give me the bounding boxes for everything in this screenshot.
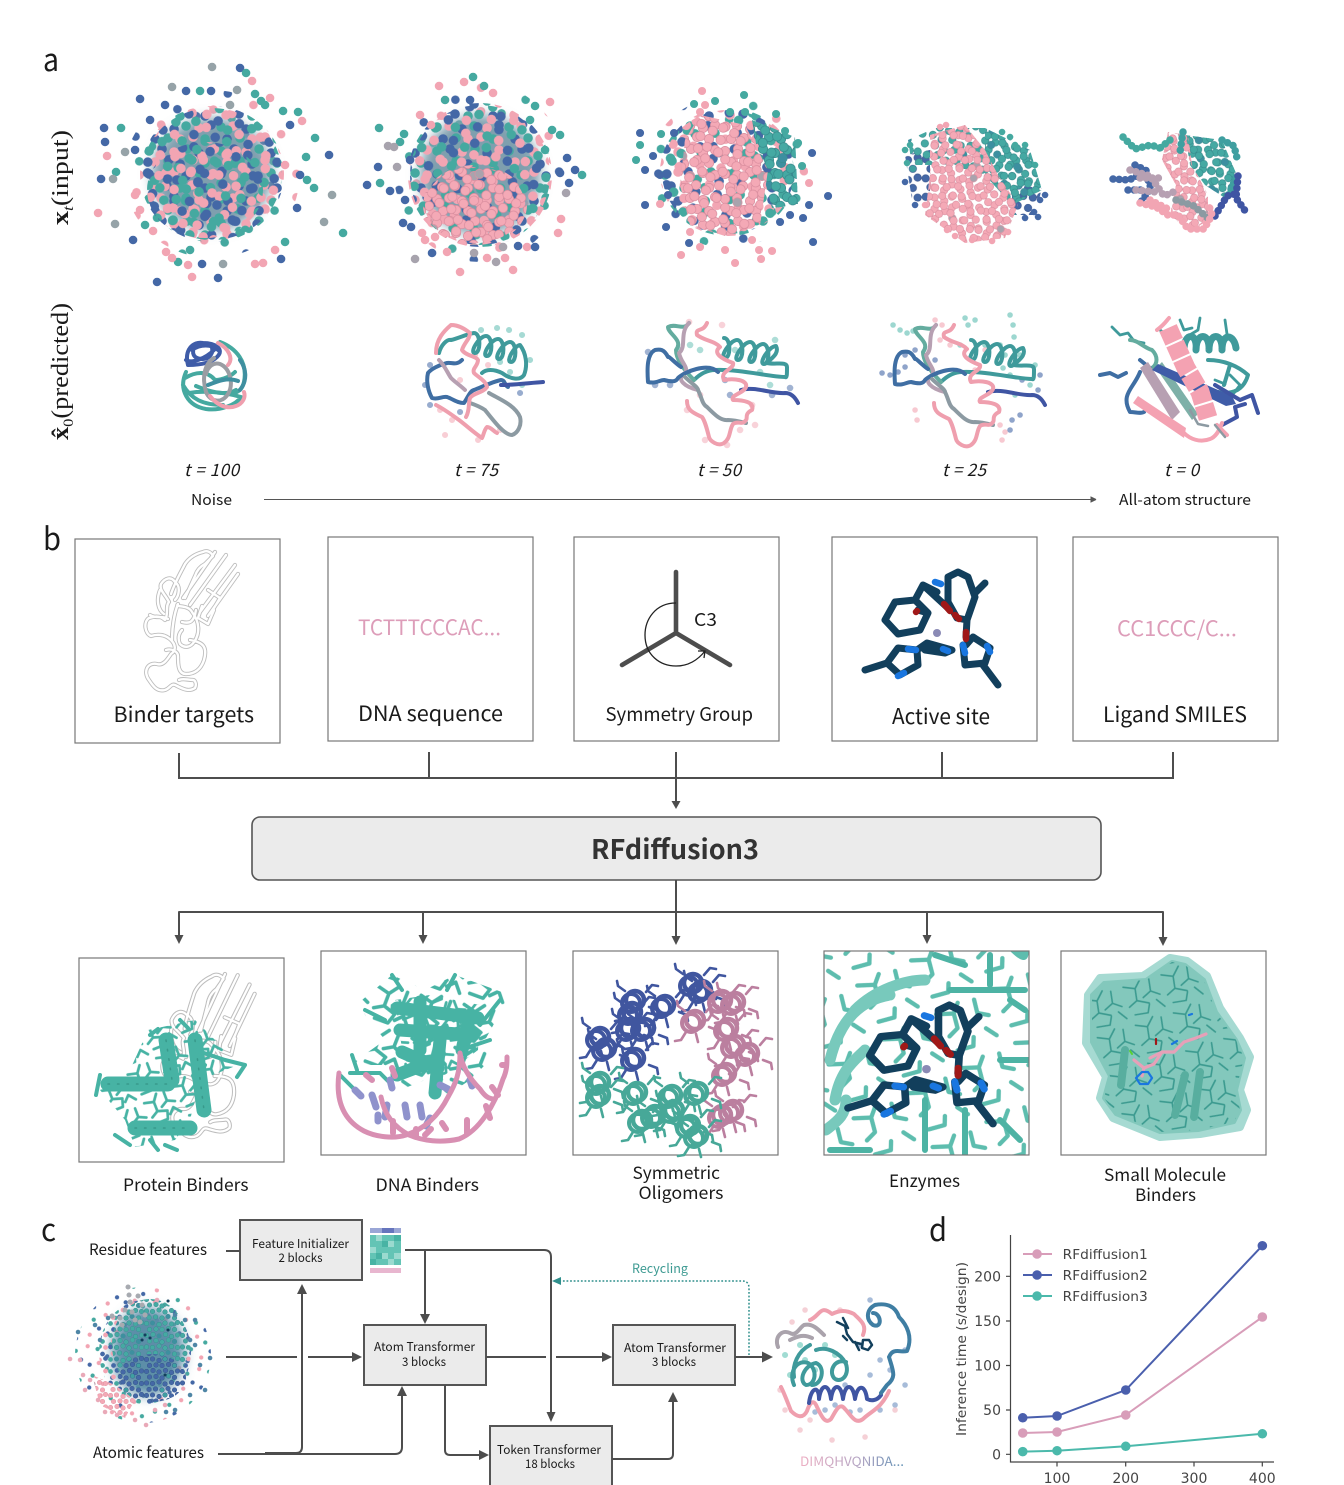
noisy atoms t=50 — [636, 91, 828, 263]
line chart: inference time — [954, 1235, 1276, 1485]
RFdiffusion3 block — [252, 817, 1101, 880]
input: binder targets: Binder targets — [114, 699, 254, 729]
output: small molecule binders — [1061, 951, 1266, 1206]
output: enzymes — [824, 951, 1030, 1192]
input: ligand SMILES — [1073, 537, 1278, 741]
input connectors — [178, 752, 1174, 809]
row label: x0 predicted: 0 — [61, 419, 77, 427]
line chart: inference time: 100 — [974, 1358, 1001, 1374]
input: binder targets — [75, 539, 280, 743]
feature heatmap — [370, 1228, 401, 1273]
input: active site: Active site — [892, 700, 990, 731]
noisy atoms t=100 — [98, 67, 343, 282]
panel letter d: d — [929, 1205, 947, 1250]
token transformer — [490, 1426, 612, 1485]
line chart: inference time: 50 — [983, 1403, 1001, 1419]
all-atom label: All-atom structure — [1119, 489, 1251, 510]
input: DNA sequence: TCTTTCCCAC... — [358, 612, 501, 642]
atom transformer 2: 3 blocks — [652, 1353, 696, 1370]
atom transformer 2: Atom Transformer — [624, 1339, 726, 1356]
timestep labels: t = 50 — [697, 456, 744, 481]
output: symmetric oligomers: Symmetric — [632, 1159, 720, 1184]
noise-to-structure arrow — [264, 497, 1096, 502]
predicted structure output — [777, 1300, 909, 1470]
timestep labels: t = 25 — [942, 456, 988, 481]
predicted fold t=25 — [882, 315, 1045, 446]
input: symmetry group: Symmetry Group — [606, 700, 753, 727]
noise label: Noise — [191, 489, 232, 510]
feature initializer block: 2 blocks — [278, 1249, 323, 1266]
row label: x0 predicted: (predicted) — [48, 303, 74, 419]
predicted structure output: DIMQHVQNIDA... — [800, 1451, 904, 1470]
feature initializer block — [240, 1220, 362, 1280]
output: enzymes: Enzymes — [889, 1167, 960, 1192]
token transformer: 18 blocks — [525, 1455, 575, 1472]
panel c — [41, 1205, 909, 1485]
line chart: inference time: RFdiffusion1 — [1063, 1247, 1148, 1263]
timestep labels: t = 100 — [184, 456, 242, 481]
noisy atoms t=75 — [367, 77, 582, 272]
output: symmetric oligomers: Oligomers — [638, 1179, 724, 1204]
noisy atoms t=0 — [1113, 132, 1246, 232]
input: DNA sequence: DNA sequence — [358, 698, 503, 728]
output: symmetric oligomers — [573, 951, 778, 1204]
panel letter c: c — [41, 1205, 56, 1250]
atom cloud input — [70, 1287, 211, 1425]
atom transformer 1 — [364, 1325, 486, 1385]
predicted fold t=50 — [648, 322, 798, 445]
recycling dotted arrow — [552, 1258, 749, 1355]
row label: x0 predicted: x̂ — [48, 427, 74, 440]
line chart: inference time: 200 — [974, 1270, 1001, 1286]
output: DNA binders: DNA Binders — [376, 1171, 479, 1196]
output connectors — [174, 880, 1168, 946]
output: small molecule binders: Binders — [1135, 1181, 1196, 1206]
output: protein binders: Protein Binders — [123, 1171, 249, 1196]
feature initializer block: Feature Initializer — [252, 1235, 349, 1252]
input: ligand SMILES: CC1CCC/C... — [1117, 613, 1237, 643]
noisy atoms t=25 — [905, 125, 1045, 243]
line chart: inference time: 0 — [992, 1448, 1001, 1464]
panel b — [43, 514, 1278, 1206]
panel a — [43, 35, 1258, 510]
predicted fold t=100 — [183, 342, 245, 409]
input: ligand SMILES: Ligand SMILES — [1103, 699, 1247, 729]
output: protein binders — [79, 958, 284, 1196]
row label: x_t input: x — [48, 211, 74, 225]
input: symmetry group: C3 — [694, 606, 717, 632]
panel d — [929, 1205, 1276, 1485]
line chart: inference time: RFdiffusion3 — [1063, 1289, 1148, 1305]
line chart: inference time: RFdiffusion2 — [1063, 1268, 1148, 1284]
line chart: inference time: Inference time (s/design) — [954, 1262, 970, 1436]
line chart: inference time: 150 — [974, 1314, 1001, 1330]
input: DNA sequence — [328, 537, 533, 741]
timestep labels: t = 75 — [454, 456, 500, 481]
timestep labels: t = 0 — [1164, 456, 1202, 481]
row label: x_t input: (input) — [48, 130, 74, 206]
output: small molecule binders: Small Molecule — [1104, 1161, 1226, 1186]
residue features label: Residue features — [89, 1238, 207, 1260]
predicted fold t=75 — [425, 325, 543, 440]
atom transformer 1: Atom Transformer — [374, 1338, 475, 1355]
row label: x_t input: t — [61, 205, 77, 211]
flow arrows — [218, 1250, 773, 1460]
input: symmetry group — [574, 537, 779, 741]
output: DNA binders — [321, 951, 526, 1196]
panel letter b: b — [43, 514, 61, 559]
atomic features label: Atomic features — [93, 1441, 204, 1463]
panel letter a: a — [43, 35, 59, 80]
final all-atom structure t=0 — [1100, 318, 1258, 441]
atom transformer 1: 3 blocks — [402, 1353, 446, 1370]
input: active site — [832, 537, 1037, 741]
recycling dotted arrow: Recycling — [632, 1258, 688, 1277]
RFdiffusion3 block: RFdiffusion3 — [591, 828, 759, 867]
token transformer: Token Transformer — [497, 1441, 601, 1458]
atom transformer 2 — [613, 1325, 735, 1385]
timestep labels — [184, 456, 1202, 481]
